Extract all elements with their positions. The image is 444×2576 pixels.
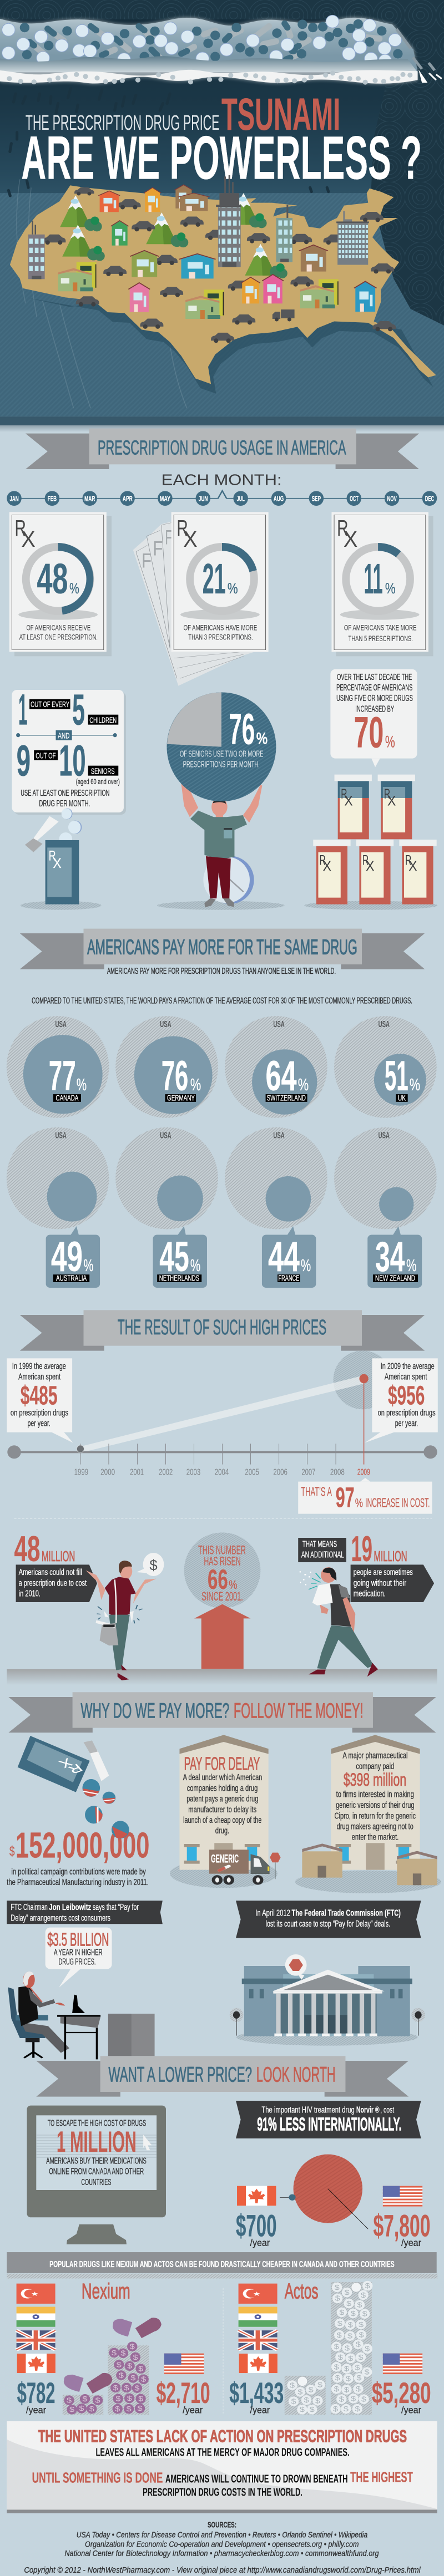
- panel: conclusion: UNTIL SOMETHING IS DONE: [32, 2470, 163, 2486]
- card: 11 percent: [331, 512, 433, 656]
- fanned prescription sheets: F: [165, 526, 172, 549]
- pills in wave: light tablets: [2, 15, 401, 67]
- icon: stack of prescription bottles: R: [341, 786, 347, 801]
- callout: 1999 spending: per year.: [27, 1419, 51, 1429]
- panel: popular drugs and conclusion: [7, 2238, 437, 2575]
- card: 21 percent: R: [176, 516, 188, 541]
- stat: 48 million: MILLION: [42, 1549, 75, 1564]
- panel: hero tsunami and map: [0, 0, 444, 432]
- panel: children, seniors and bottles: USE AT LEAST ONE PRESCRIPTION: [21, 789, 109, 798]
- chart: timeline of cost: 2005: [245, 1467, 259, 1477]
- illustration: woman with empty pockets: [86, 1561, 157, 1680]
- stat: France 44 percent: 44: [268, 1233, 300, 1280]
- month timeline: NOV: [387, 494, 397, 503]
- callout: 1999 spending: $485: [21, 1380, 58, 1410]
- stat: New Zealand 34 percent: NEW ZEALAND: [375, 1274, 415, 1283]
- chart: Nexium coin bars: [63, 2318, 162, 2415]
- stat: UK 51 percent: [374, 1053, 426, 1106]
- chart: 76 percent pie: %: [256, 729, 268, 748]
- month timeline: JUL: [237, 494, 245, 503]
- banner: federal trade commission: In April 2012: [255, 1908, 290, 1918]
- illustration: man holding pie chart: [157, 773, 285, 910]
- building: 398 million: company paid: [356, 1762, 394, 1771]
- panel: office, capitol and look north: [8, 1954, 431, 2244]
- stat: 19 million: medication.: [354, 1589, 386, 1598]
- USA labels: USA: [55, 1131, 67, 1140]
- flag: Canada: [237, 2186, 276, 2206]
- stat: 48 million: 48: [14, 1528, 40, 1569]
- icon: computer monitor: COUNTRIES: [81, 2178, 112, 2187]
- map: cars: [43, 187, 396, 343]
- banner: HIV treatment: Norvir ®: [356, 2105, 380, 2115]
- chart: Nexium coin bars: $$$$$$$$$$$$$$$$$$$$$$$$$: [67, 2343, 146, 2414]
- illustration: capitol building: [230, 1966, 425, 2046]
- stat: Switzerland 64 percent: [252, 1049, 317, 1115]
- stat: Australia 49 percent: %: [84, 1256, 93, 1275]
- stat: New Zealand 34 percent: %: [406, 1256, 417, 1275]
- panel: people going without medication: THIS NUMBER: [198, 1543, 246, 1557]
- bubble: children and seniors: 1: [18, 685, 27, 734]
- card: 11 percent: R: [337, 516, 349, 541]
- panel: popular drugs and conclusion: Actos: [285, 2279, 318, 2303]
- ground band: [7, 1669, 437, 1685]
- card: 48 percent: [9, 512, 112, 656]
- tsunami wave: [0, 15, 418, 85]
- panel: office, capitol and look north: AMERICANS BUY THEIR MEDICATIONS: [46, 2156, 147, 2166]
- bubble: children and seniors: 5: [72, 685, 85, 734]
- sources: [64, 2519, 379, 2558]
- Nexium prices: [17, 2376, 210, 2416]
- sea and sky background: [0, 0, 444, 416]
- stat: Germany 76 percent: [134, 1036, 213, 1114]
- heading ribbon: [20, 929, 425, 969]
- chart: timeline of cost: [7, 1374, 437, 1477]
- heading ribbon: [20, 1310, 425, 1351]
- panel: follow the money: 152,000,000: [16, 1825, 149, 1865]
- stat: Canada 77 percent: 77: [49, 1053, 76, 1099]
- per year labels for Norvir: /year: [250, 2238, 270, 2248]
- stat: number has risen 66 percent: 66: [208, 1563, 228, 1595]
- USA labels: USA: [273, 1131, 285, 1140]
- stat: Australia 49 percent: [46, 1172, 100, 1288]
- building: pay for delay: manufacturer to delay its: [188, 1805, 256, 1815]
- bubble: children and seniors: CHILDREN: [89, 716, 117, 725]
- icon: pill bottle with pills: [21, 808, 102, 910]
- chart: timeline of cost: 2003: [186, 1467, 200, 1477]
- per year labels for Norvir: [250, 2238, 421, 2248]
- chart: timeline of cost: 2007: [301, 1467, 315, 1477]
- title: THE PRESCRIPTION DRUG PRICE: [26, 111, 219, 135]
- panel: popular drugs and conclusion: $2,710: [157, 2376, 210, 2409]
- month timeline: JUN: [199, 494, 208, 503]
- icon: tipped bottle spilling campaign pins: R: [65, 1761, 85, 1776]
- USA labels: USA: [273, 1020, 285, 1029]
- building: pay for delay: drug.: [215, 1826, 229, 1836]
- card: 21 percent: X: [183, 527, 198, 552]
- stat: Canada 77 percent: CANADA: [56, 1094, 79, 1102]
- stat: number has risen 66 percent: SINCE 2001.: [201, 1590, 243, 1603]
- month timeline: APR: [123, 494, 133, 503]
- panel: people going without medication: [7, 1528, 437, 1732]
- month timeline: MAY: [160, 494, 170, 503]
- card: 48 percent: AT LEAST ONE PRESCRIPTION.: [19, 633, 98, 641]
- Actos prices: $1,433: [229, 2376, 284, 2409]
- banner: FTC chairman: Delay” arrangements cost consumers: [11, 1913, 110, 1923]
- panel: follow the money: PAY FOR DELAY: [184, 1754, 260, 1774]
- stat: Netherlands 45 percent: %: [190, 1256, 200, 1275]
- stat: New Zealand 34 percent: 34: [375, 1233, 405, 1280]
- stat: Netherlands 45 percent: [153, 1176, 207, 1288]
- stat: UK 51 percent: 51: [385, 1053, 408, 1099]
- icon: stack of prescription bottles: X: [387, 792, 396, 809]
- icon: tipped bottle spilling campaign pins: [18, 1736, 115, 1823]
- panel: children, seniors and bottles: [12, 669, 437, 910]
- hatched highlight circle: [334, 1350, 392, 1409]
- sources: SOURCES:: [208, 2519, 236, 2529]
- building: pay for delay: patent pays a generic drug: [186, 1795, 258, 1804]
- month timeline: MAR: [84, 494, 95, 503]
- fanned prescription sheets: [133, 521, 255, 686]
- panel: prescription drug usage in America: [7, 429, 437, 686]
- icon: generic drug truck: [209, 1850, 270, 1884]
- card: 21 percent: [171, 512, 269, 652]
- banner: FTC chairman: Jon Leibowitz: [49, 1903, 91, 1912]
- panel: the result of such high prices: [7, 1310, 438, 1518]
- flag: USA: [383, 2186, 422, 2207]
- callout: 97 percent increase: THAT’S A: [301, 1485, 332, 1499]
- panel: office, capitol and look north: $700: [236, 2209, 276, 2243]
- panel: follow the money: the Pharmaceutical Manufacturing industry in 2011.: [7, 1878, 149, 1887]
- card: 11 percent: 11: [364, 555, 383, 603]
- stat: Australia 49 percent: 49: [51, 1233, 83, 1280]
- card: 48 percent: 48: [37, 555, 68, 603]
- panel: office, capitol and look north: 1 MILLION: [57, 2126, 137, 2158]
- bubble: children and seniors: 10: [59, 736, 86, 785]
- card: 48 percent: %: [69, 581, 79, 597]
- callout: 2009 spending: [365, 1358, 438, 1443]
- stat: Canada 77 percent: [23, 1035, 103, 1114]
- chart: Actos coin bars: $$$$$$$$$$$$$$$$$$$$$$$$$$$$$$$$$$$$$$$$$$$$$$$$: [290, 2283, 370, 2414]
- Nexium title: Nexium: [82, 2279, 130, 2303]
- panel: follow the money: in political campaign contributions were made by: [11, 1867, 146, 1877]
- stat: 48 million: Americans could not fill: [19, 1568, 82, 1577]
- building: pay for delay: launch of a cheap copy of the: [183, 1816, 261, 1825]
- illustration: sneezing man: [300, 1567, 378, 1676]
- card: 48 percent: R: [15, 516, 26, 541]
- stat: 19 million: [298, 1528, 434, 1602]
- stat: number has risen 66 percent: [184, 1532, 260, 1608]
- map of USA shadow: [28, 286, 433, 394]
- callout: 1999 spending: American spent: [18, 1372, 60, 1381]
- grey wave band: [0, 56, 418, 72]
- icon: tipped bottle spilling campaign pins: X: [56, 1756, 75, 1770]
- card: 48 percent: X: [21, 527, 36, 552]
- arrow: rising: [194, 1604, 251, 1669]
- bubble: 3.5 billion: DRUG PRICES.: [59, 1957, 95, 1967]
- Actos prices: /year: [250, 2405, 270, 2416]
- white foam: [0, 70, 418, 84]
- band shadow: [0, 425, 444, 432]
- icon: generic drug truck: GENERIC: [211, 1852, 239, 1865]
- callout: 97 percent increase: %: [355, 1496, 363, 1510]
- card: 11 percent: X: [344, 527, 357, 552]
- chart: 76 percent pie: 76: [229, 704, 255, 754]
- callout: 97 percent increase: 97: [336, 1482, 355, 1513]
- USA labels: USA: [160, 1020, 171, 1029]
- bubble: children and seniors: DRUG PER MONTH.: [39, 799, 90, 809]
- USA labels: USA: [379, 1020, 390, 1029]
- callout: 1999 spending: [7, 1358, 73, 1443]
- stat: number has risen 66 percent: HAS RISEN: [204, 1554, 241, 1568]
- icon: speech bubble with dollar sign: $: [149, 1557, 158, 1574]
- Nexium prices: $782: [17, 2376, 55, 2409]
- USA labels: USA: [55, 1020, 67, 1029]
- icon: speech bubble with dollar sign: [137, 1553, 164, 1576]
- panel: children, seniors and bottles: (aged 60 and over): [76, 778, 120, 786]
- Actos prices: [229, 2376, 431, 2416]
- month timeline: [7, 491, 437, 506]
- icon: stack of prescription bottles: X: [366, 858, 375, 873]
- banner: federal trade commission: [236, 1901, 421, 1938]
- building: pay for delay: companies holding a drug: [187, 1784, 258, 1793]
- chart: timeline of cost: 2006: [273, 1467, 287, 1477]
- chart: timeline of cost: 2004: [215, 1467, 229, 1477]
- card: 11 percent: %: [385, 581, 396, 597]
- stat: France 44 percent: %: [301, 1256, 311, 1275]
- chart: 76 percent pie: [167, 692, 276, 801]
- stat: Switzerland 64 percent: 64: [266, 1053, 297, 1099]
- month timeline: JAN: [9, 494, 19, 503]
- grey bar heading: [7, 2252, 437, 2278]
- banner: FTC chairman: [7, 1901, 163, 1924]
- stat: New Zealand 34 percent: [367, 1187, 422, 1288]
- stat: 19 million: AN ADDITIONAL: [301, 1551, 344, 1560]
- Nexium prices: /year: [26, 2405, 46, 2416]
- banner: HIV treatment: , cost: [380, 2105, 394, 2115]
- heading ribbon: follow the money: [8, 1692, 436, 1732]
- stat: Switzerland 64 percent: SWITZERLAND: [267, 1094, 306, 1102]
- heading ribbon: look north: [36, 2056, 408, 2097]
- stat: France 44 percent: FRANCE: [279, 1274, 299, 1283]
- bubble: 70 percent: %: [385, 733, 395, 751]
- icon: stop sign bubble: [285, 1954, 307, 1980]
- bubble: children and seniors: OUT OF: [36, 751, 56, 760]
- bubble: children and seniors: AND: [58, 731, 70, 740]
- pills in wave: capsules: [30, 23, 380, 65]
- month timeline: AUG: [274, 494, 284, 503]
- panel: follow the money: A YEAR IN HIGHER: [54, 1948, 103, 1957]
- falling rain drops: [8, 88, 329, 196]
- map: mountains: [60, 193, 287, 278]
- USA labels: USA: [379, 1131, 390, 1140]
- card: 48 percent: OF AMERICANS RECEIVE: [26, 623, 90, 632]
- bubble: 3.5 billion: [46, 1928, 112, 1988]
- stat: number has risen 66 percent: %: [229, 1578, 238, 1592]
- card: 21 percent: THAN 3 PRESCRIPTIONS.: [188, 633, 253, 641]
- stat: 48 million: [14, 1528, 97, 1602]
- callout: 1999 spending: on prescription drugs: [11, 1408, 68, 1418]
- stat: Netherlands 45 percent: 45: [159, 1233, 189, 1280]
- stat: Germany 76 percent: 76: [162, 1053, 188, 1099]
- card: 21 percent: 21: [203, 555, 226, 603]
- stat: Germany 76 percent: GERMANY: [167, 1094, 195, 1102]
- stat: 19 million: THAT MEANS: [302, 1539, 337, 1549]
- panel: office, capitol and look north: TO ESCAPE THE HIGH COST OF DRUGS: [48, 2118, 146, 2128]
- wave debris: [396, 29, 442, 83]
- bubble: children and seniors: OUT OF EVERY: [31, 700, 69, 709]
- stat: 152 million contributions: $: [9, 1843, 15, 1859]
- card: 21 percent: OF AMERICANS HAVE MORE: [184, 623, 257, 632]
- callout: 97 percent increase: [298, 1478, 432, 1514]
- bubble: children and seniors: SENIORS: [91, 767, 115, 776]
- panel: follow the money: [7, 1735, 441, 1988]
- month timeline: OCT: [350, 494, 359, 503]
- icon: stop sign: [270, 1853, 281, 1879]
- rain streaks: [17, 179, 187, 408]
- per year labels for Norvir: /year: [401, 2238, 421, 2248]
- panel: Americans pay more for the same drug: [7, 929, 437, 1288]
- stat: Canada 77 percent: %: [77, 1075, 87, 1094]
- Actos column flags: [239, 2284, 422, 2374]
- stat: 48 million: a prescription due to cost: [19, 1578, 87, 1588]
- bubble: children and seniors: 9: [17, 736, 31, 785]
- Nexium prices: /year: [183, 2405, 203, 2416]
- USA labels: [55, 1020, 390, 1140]
- icon: computer monitor: [27, 2106, 166, 2244]
- map of USA: [10, 185, 436, 384]
- chart: timeline of cost: 2009: [357, 1467, 370, 1477]
- fanned prescription sheets: F: [153, 537, 163, 560]
- Nexium column flags: [17, 2284, 204, 2374]
- stat: Switzerland 64 percent: %: [298, 1075, 309, 1094]
- banner: FTC chairman: says that “Pay for: [93, 1903, 139, 1912]
- chart: timeline of cost: 2000: [100, 1467, 115, 1477]
- fanned prescription sheets: F: [142, 550, 152, 572]
- chart: timeline of cost: 2001: [130, 1467, 144, 1477]
- icon: stack of prescription bottles: R: [320, 852, 326, 868]
- title: TSUNAMI: [221, 89, 340, 140]
- icon: stack of prescription bottles: R: [362, 852, 369, 868]
- icon: stack of prescription bottles: X: [344, 792, 353, 809]
- building: 398 million: [295, 1735, 441, 1893]
- stat: Germany 76 percent: %: [190, 1075, 201, 1094]
- icon: stack of prescription bottles: R: [405, 852, 411, 868]
- panel: children, seniors and bottles: OF SENIORS USE TWO OR MORE: [180, 749, 263, 759]
- chart: Norvir price comparison: [280, 2155, 368, 2229]
- stat: 152 million contributions: [7, 1821, 149, 1887]
- stat: 19 million: 19: [351, 1528, 372, 1569]
- icon: stack of prescription bottles: X: [323, 858, 331, 873]
- chart: timeline of cost: 2002: [159, 1467, 173, 1477]
- chart: timeline of cost: 1999: [74, 1467, 88, 1477]
- banner: HIV treatment: [236, 2101, 421, 2138]
- panel: conclusion: [7, 2421, 437, 2513]
- pills in wave: dark tablets: [20, 19, 403, 61]
- bubble: 70 percent: [330, 669, 417, 767]
- banner: FTC chairman: FTC Chairman: [11, 1903, 48, 1912]
- foam dots: [7, 70, 412, 85]
- icon: stack of prescription bottles: R: [384, 786, 390, 801]
- heading ribbon: [26, 429, 419, 469]
- building: pay for delay: [170, 1735, 278, 1888]
- month timeline: FEB: [48, 494, 57, 503]
- icon: computer monitor: ONLINE FROM CANADA AND OTHER: [49, 2167, 144, 2177]
- stat: Netherlands 45 percent: NETHERLANDS: [159, 1274, 199, 1283]
- Actos prices: /year: [401, 2405, 421, 2416]
- chart: timeline of cost: 2008: [330, 1467, 345, 1477]
- bubble: 70 percent: 70: [354, 708, 384, 757]
- icon: stack of prescription bottles: X: [408, 858, 417, 873]
- month timeline: SEP: [312, 494, 321, 503]
- panel: children, seniors and bottles: PRESCRIPTIONS PER MONTH.: [183, 760, 260, 770]
- icon: stack of prescription bottles: [304, 775, 437, 910]
- title: [21, 89, 422, 192]
- USA labels: USA: [160, 1131, 171, 1140]
- card: 21 percent: %: [228, 581, 238, 597]
- illustration: chairman at desk: [8, 1972, 155, 2059]
- stat: UK 51 percent: UK: [398, 1094, 406, 1102]
- stat: UK 51 percent: %: [410, 1075, 420, 1094]
- stat: Australia 49 percent: AUSTRALIA: [56, 1274, 87, 1283]
- stat: France 44 percent: [262, 1176, 316, 1288]
- building: pay for delay: A deal under which American: [183, 1773, 262, 1782]
- callout: 1999 spending: In 1999 the average: [12, 1361, 66, 1371]
- icon: pill bottle with pills: X: [53, 855, 62, 871]
- map: skyscrapers: [28, 175, 369, 279]
- stat: 48 million: in 2010.: [19, 1589, 41, 1598]
- panel: follow the money: $3.5 BILLION: [47, 1929, 109, 1950]
- each month heading: EACH MONTH:: [162, 471, 282, 489]
- bottom band of hero: [0, 416, 444, 425]
- bubble: children and seniors: [12, 685, 126, 815]
- icon: pill bottle with pills: R: [49, 847, 56, 863]
- map: houses: [58, 185, 377, 319]
- USA comparison circles: [7, 1016, 437, 1229]
